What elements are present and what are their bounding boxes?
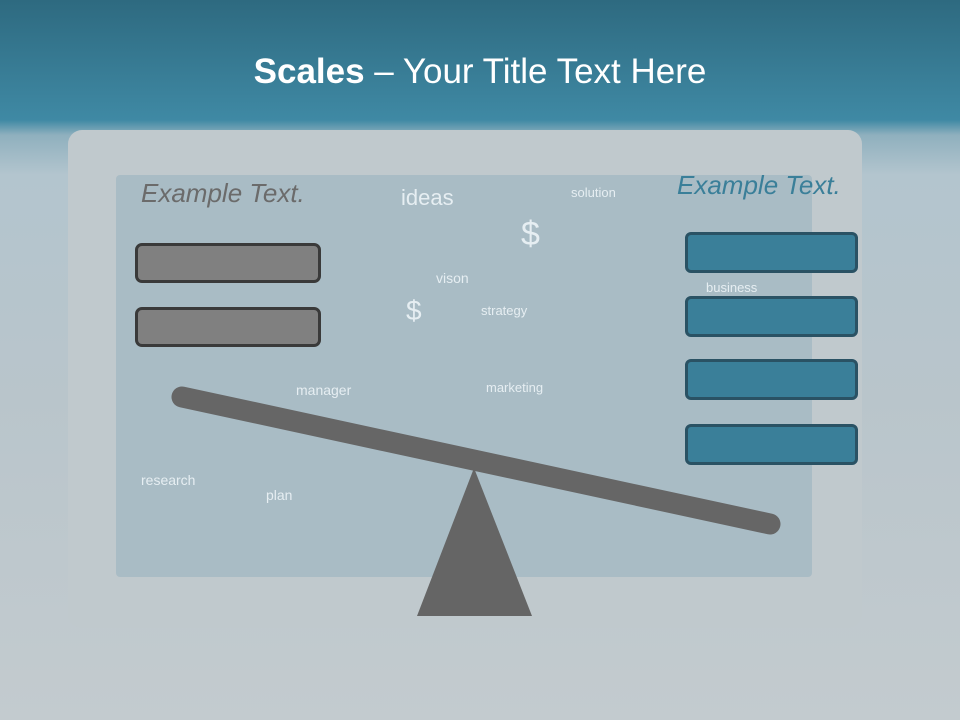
beam: [182, 397, 770, 524]
box 2: [135, 307, 321, 347]
tablet frame: [68, 130, 862, 628]
left boxes: [135, 243, 321, 347]
sketch words: strategy: [481, 303, 527, 318]
sketch words: manager: [296, 382, 351, 398]
right heading: Example Text.: [677, 170, 841, 200]
sketch words: business: [706, 280, 757, 295]
fulcrum: [417, 468, 532, 616]
box r4: [685, 424, 858, 465]
sketch words: plan: [266, 487, 292, 503]
title: Scales – Your Title Text Here: [254, 52, 706, 91]
sketch words: marketing: [486, 380, 543, 395]
box 1: [135, 243, 321, 283]
sketch words: research: [141, 472, 195, 488]
sketch words: solution: [571, 185, 616, 200]
sketch words: [141, 185, 757, 503]
box r1: [685, 232, 858, 273]
box r2: [685, 296, 858, 337]
screen with sketches: [116, 175, 812, 577]
sketch words: $: [521, 215, 540, 253]
sketch words: ideas: [401, 185, 454, 210]
right boxes: [685, 232, 858, 465]
box r3: [685, 359, 858, 400]
left heading: Example Text.: [141, 178, 305, 208]
sketch words: $: [406, 295, 422, 326]
sketch words: vison: [436, 270, 469, 286]
